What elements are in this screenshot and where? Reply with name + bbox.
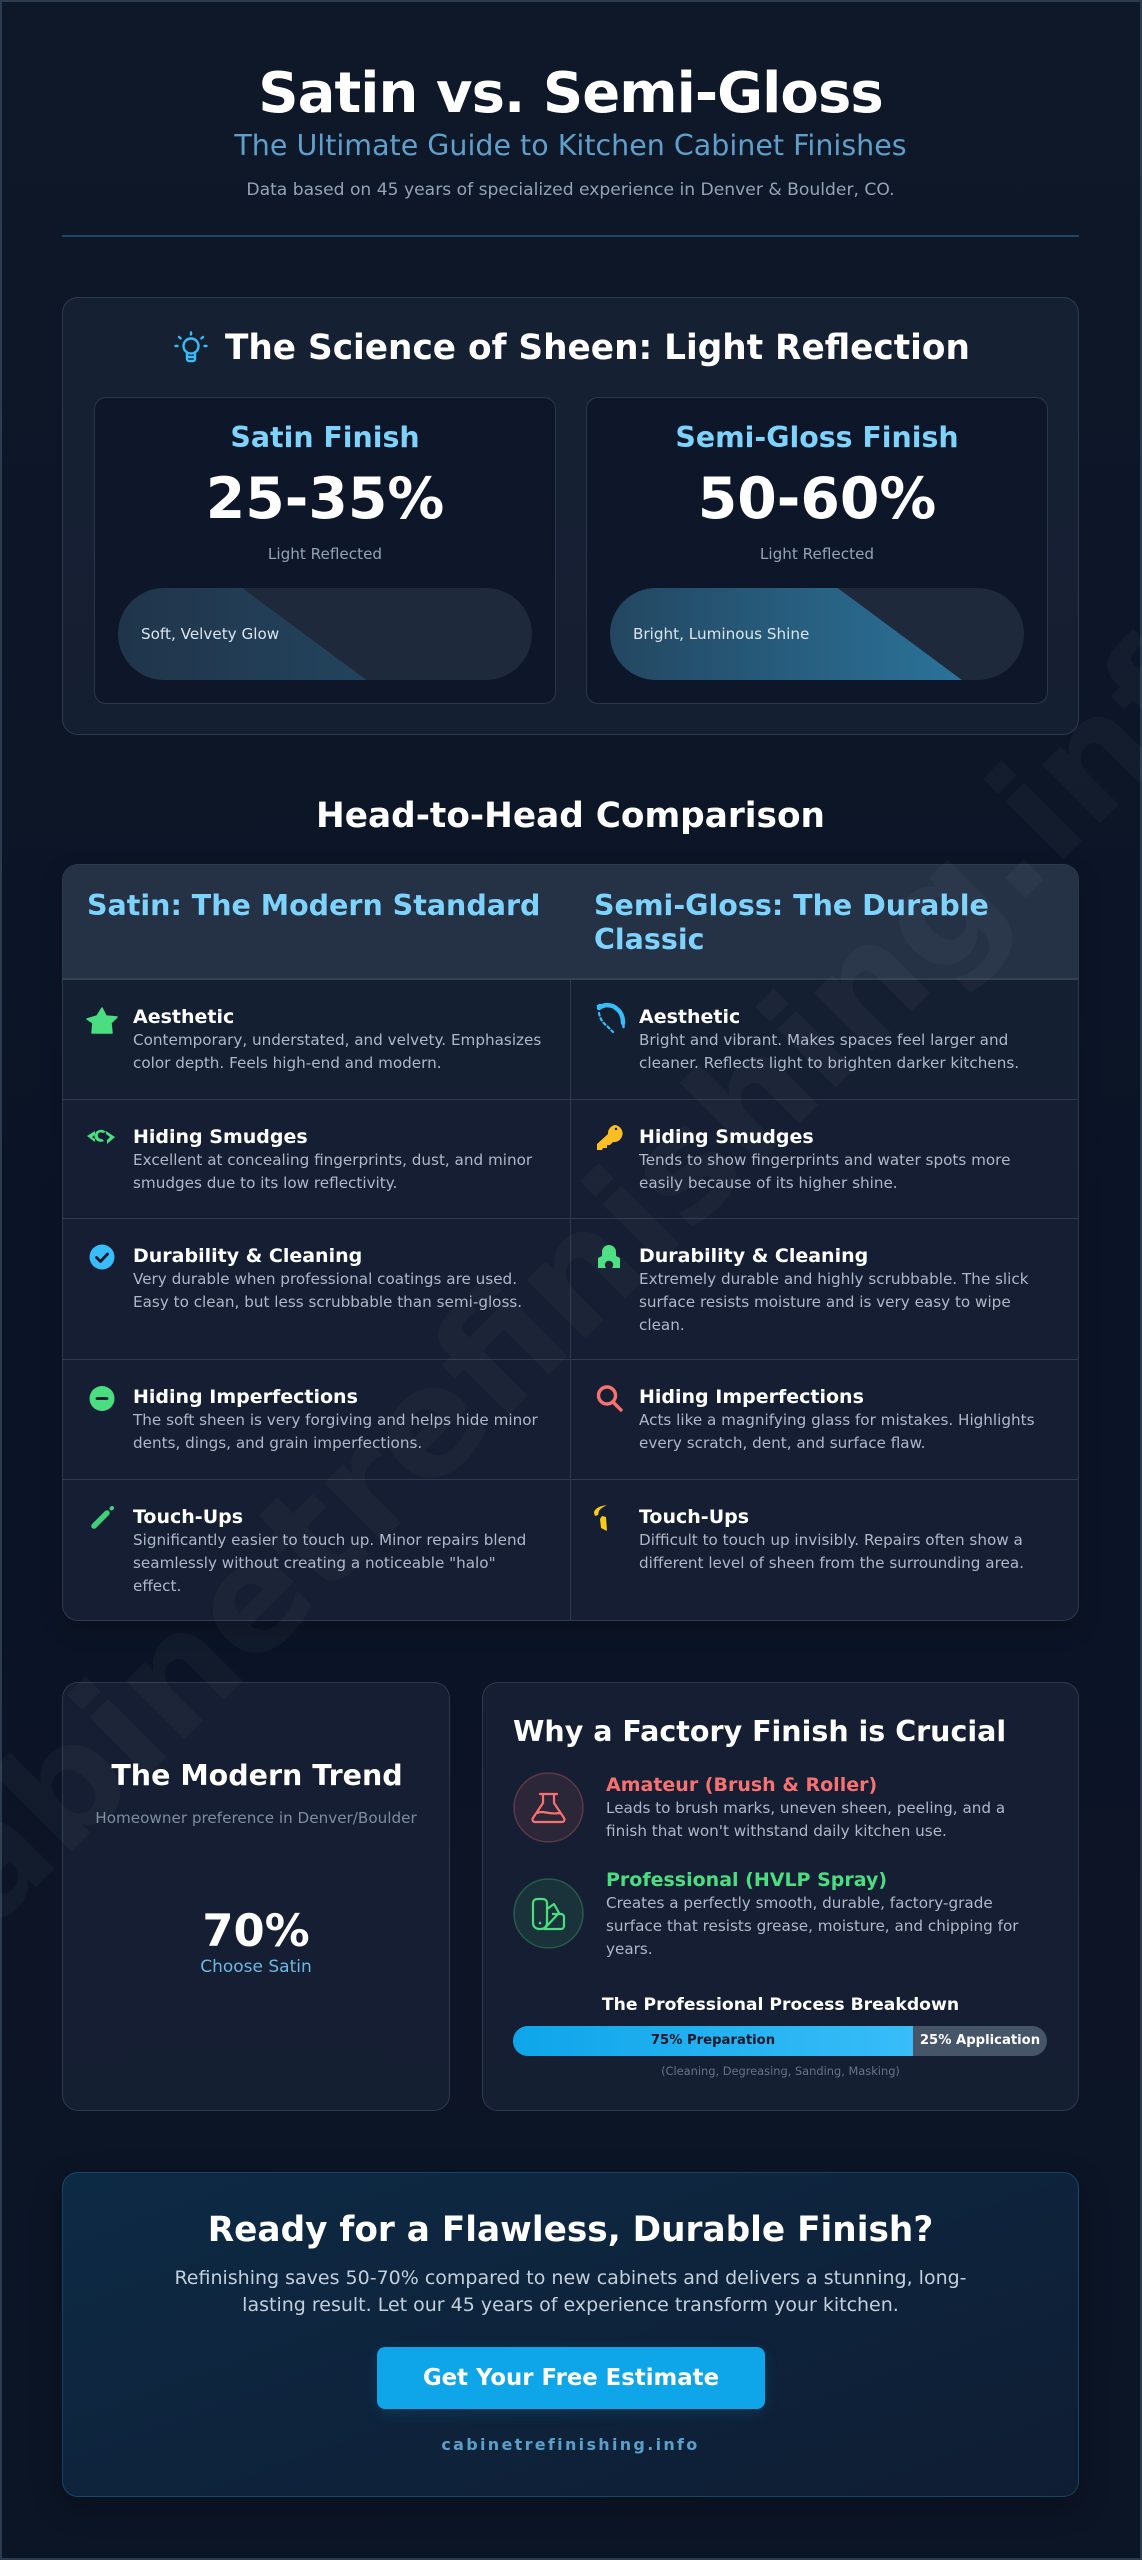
text: Aesthetic xyxy=(639,1006,740,1028)
preparation segment xyxy=(513,2026,913,2056)
semi-gloss column title: Semi-Gloss: The Durable xyxy=(594,888,989,922)
text xyxy=(639,1386,1034,1452)
cta text: lasting result. Let our 45 years of experience transform your kitchen. xyxy=(242,2294,899,2316)
satin bar label: Soft, Velvety Glow xyxy=(141,625,279,643)
row: semi-gloss touch-ups xyxy=(594,1505,1024,1572)
text: The soft sheen is very forgiving and helps hide minor xyxy=(133,1411,538,1429)
satin label: Satin Finish xyxy=(230,421,420,454)
text: Hiding Imperfections xyxy=(133,1386,358,1408)
icon: flask xyxy=(513,1772,584,1843)
data note: Data based on 45 years of specialized experience in Denver & Boulder, CO. xyxy=(246,180,895,200)
process note: (Cleaning, Degreasing, Sanding, Masking) xyxy=(661,2064,900,2078)
text: color depth. Feels high-end and modern. xyxy=(133,1054,442,1072)
icon: check circle xyxy=(90,1244,114,1270)
row: satin smudges xyxy=(63,1100,571,1219)
panel: comparison table xyxy=(62,864,1079,1621)
text: Hiding Imperfections xyxy=(639,1386,864,1408)
icon: swatch xyxy=(513,1878,584,1949)
text xyxy=(133,1126,532,1192)
text: Touch-Ups xyxy=(133,1506,243,1528)
row: semi-gloss imperfections xyxy=(571,1360,1079,1480)
icon: water splash xyxy=(596,1002,626,1034)
text: Hiding Smudges xyxy=(639,1126,814,1148)
icon: minus circle xyxy=(90,1386,114,1411)
text: easily because of its higher shine. xyxy=(639,1174,898,1192)
satin column title: Satin: The Modern Standard xyxy=(87,888,540,922)
icon: magnifier xyxy=(596,1385,623,1412)
cta text xyxy=(174,2267,967,2316)
text: Very durable when professional coatings are used. xyxy=(133,1270,517,1288)
process heading: The Professional Process Breakdown xyxy=(602,1995,959,2015)
heading: science of sheen: The Science of Sheen: Light Reflection xyxy=(225,328,970,368)
text: Tends to show fingerprints and water spots more xyxy=(639,1151,1010,1169)
panel: factory finish xyxy=(482,1682,1079,2111)
text xyxy=(638,1126,1010,1192)
professional text: Professional (HVLP Spray) xyxy=(606,1868,887,1890)
row: satin aesthetic xyxy=(63,980,571,1100)
panel: science of sheen xyxy=(62,297,1079,735)
cta text: Refinishing saves 50-70% compared to new cabinets and delivers a stunning, long- xyxy=(174,2267,967,2289)
cta button xyxy=(377,2347,765,2409)
semi-gloss column title xyxy=(594,888,989,956)
semi-gloss sheen bar xyxy=(610,588,1024,680)
text: seamlessly without creating a noticeable "halo" xyxy=(133,1554,496,1572)
text xyxy=(639,1506,1024,1572)
row: satin imperfections xyxy=(63,1360,571,1480)
text xyxy=(133,1506,526,1595)
trend subtext: Homeowner preference in Denver/Boulder xyxy=(95,1809,417,1827)
icon: yellow fragments xyxy=(594,1505,607,1531)
text: effect. xyxy=(133,1577,181,1595)
semi-gloss bar label: Bright, Luminous Shine xyxy=(633,625,809,643)
text: dents, dings, and grain imperfections. xyxy=(133,1434,422,1452)
panel: call to action xyxy=(62,2172,1079,2497)
text: different level of sheen from the surrounding area. xyxy=(639,1554,1024,1572)
panel: modern trend xyxy=(62,1682,450,2111)
professional text: surface that resists grease, moisture, and chipping for xyxy=(606,1917,1019,1935)
table header xyxy=(63,865,1078,980)
amateur text: Leads to brush marks, uneven sheen, peeling, and a xyxy=(606,1799,1005,1817)
text xyxy=(132,1386,538,1452)
amateur text: finish that won't withstand daily kitchen use. xyxy=(606,1822,947,1840)
cta button: Get Your Free Estimate xyxy=(423,2365,719,2391)
satin percent: 25-35% xyxy=(206,466,444,532)
row: semi-gloss durability xyxy=(571,1219,1079,1360)
professional text: years. xyxy=(606,1940,653,1958)
row: satin touch-ups xyxy=(63,1480,571,1620)
text: Hiding Smudges xyxy=(133,1126,308,1148)
website url: cabinetrefinishing.info xyxy=(441,2435,700,2454)
card: semi-gloss finish xyxy=(586,397,1048,704)
text xyxy=(133,1006,541,1072)
title: Satin vs. Semi-Gloss xyxy=(258,60,883,126)
text: Aesthetic xyxy=(133,1006,234,1028)
application segment: 25% Application xyxy=(920,2033,1040,2048)
text: Durability & Cleaning xyxy=(639,1244,868,1266)
satin sheen bar xyxy=(118,588,532,680)
icon: lightbulb xyxy=(174,331,208,362)
trend heading: The Modern Trend xyxy=(111,1759,403,1792)
text: Extremely durable and highly scrubbable. The slick xyxy=(639,1270,1029,1288)
semi-gloss caption: Light Reflected xyxy=(760,544,874,562)
subtitle: The Ultimate Guide to Kitchen Cabinet Finishes xyxy=(234,128,907,162)
trend statistic: 70% xyxy=(202,1904,310,1957)
professional text: Creates a perfectly smooth, durable, factory-grade xyxy=(606,1894,993,1912)
satin caption: Light Reflected xyxy=(268,544,382,562)
amateur text xyxy=(606,1774,1005,1840)
semi-gloss column title: Classic xyxy=(594,922,705,956)
text: Significantly easier to touch up. Minor repairs blend xyxy=(133,1531,526,1549)
icon: pencil xyxy=(91,1506,114,1529)
text: Acts like a magnifying glass for mistakes. Highlights xyxy=(639,1411,1034,1429)
semi-gloss percent: 50-60% xyxy=(698,466,936,532)
amateur text: Amateur (Brush & Roller) xyxy=(606,1774,877,1796)
text: Durability & Cleaning xyxy=(133,1244,362,1266)
amateur item xyxy=(513,1772,1005,1843)
row: semi-gloss smudges xyxy=(571,1100,1079,1219)
text: clean. xyxy=(639,1316,685,1334)
process bar xyxy=(513,2026,1047,2056)
icon: green arch xyxy=(598,1245,620,1268)
heading: head-to-head: Head-to-Head Comparison xyxy=(316,796,825,836)
icon: star xyxy=(86,1007,118,1034)
row: semi-gloss aesthetic xyxy=(571,980,1079,1100)
professional item xyxy=(513,1868,1019,1958)
text: Excellent at concealing fingerprints, dust, and minor xyxy=(133,1151,532,1169)
card: satin finish xyxy=(94,397,556,704)
text: Bright and vibrant. Makes spaces feel larger and xyxy=(639,1031,1008,1049)
row: satin durability xyxy=(63,1219,571,1360)
text xyxy=(639,1244,1029,1334)
text: smudges due to its low reflectivity. xyxy=(133,1174,397,1192)
text: surface resists moisture and is very easy to wipe xyxy=(639,1293,1011,1311)
icon: key xyxy=(597,1125,623,1150)
text: Difficult to touch up invisibly. Repairs often show a xyxy=(639,1531,1023,1549)
professional text xyxy=(606,1868,1019,1958)
text: Contemporary, understated, and velvety. Emphasizes xyxy=(133,1031,541,1049)
icon: eye arrows xyxy=(87,1130,115,1144)
text: cleaner. Reflects light to brighten darker kitchens. xyxy=(639,1054,1019,1072)
cta heading: Ready for a Flawless, Durable Finish? xyxy=(208,2210,933,2250)
trend stat label: Choose Satin xyxy=(200,1957,312,1977)
text: every scratch, dent, and surface flaw. xyxy=(639,1434,925,1452)
preparation segment: 75% Preparation xyxy=(651,2033,775,2048)
semi-gloss label: Semi-Gloss Finish xyxy=(675,421,959,454)
text xyxy=(133,1244,522,1311)
factory heading: Why a Factory Finish is Crucial xyxy=(513,1714,1006,1748)
header xyxy=(62,50,1079,237)
text xyxy=(639,1006,1019,1072)
text: Easy to clean, but less scrubbable than semi-gloss. xyxy=(133,1293,522,1311)
text: Touch-Ups xyxy=(639,1506,749,1528)
